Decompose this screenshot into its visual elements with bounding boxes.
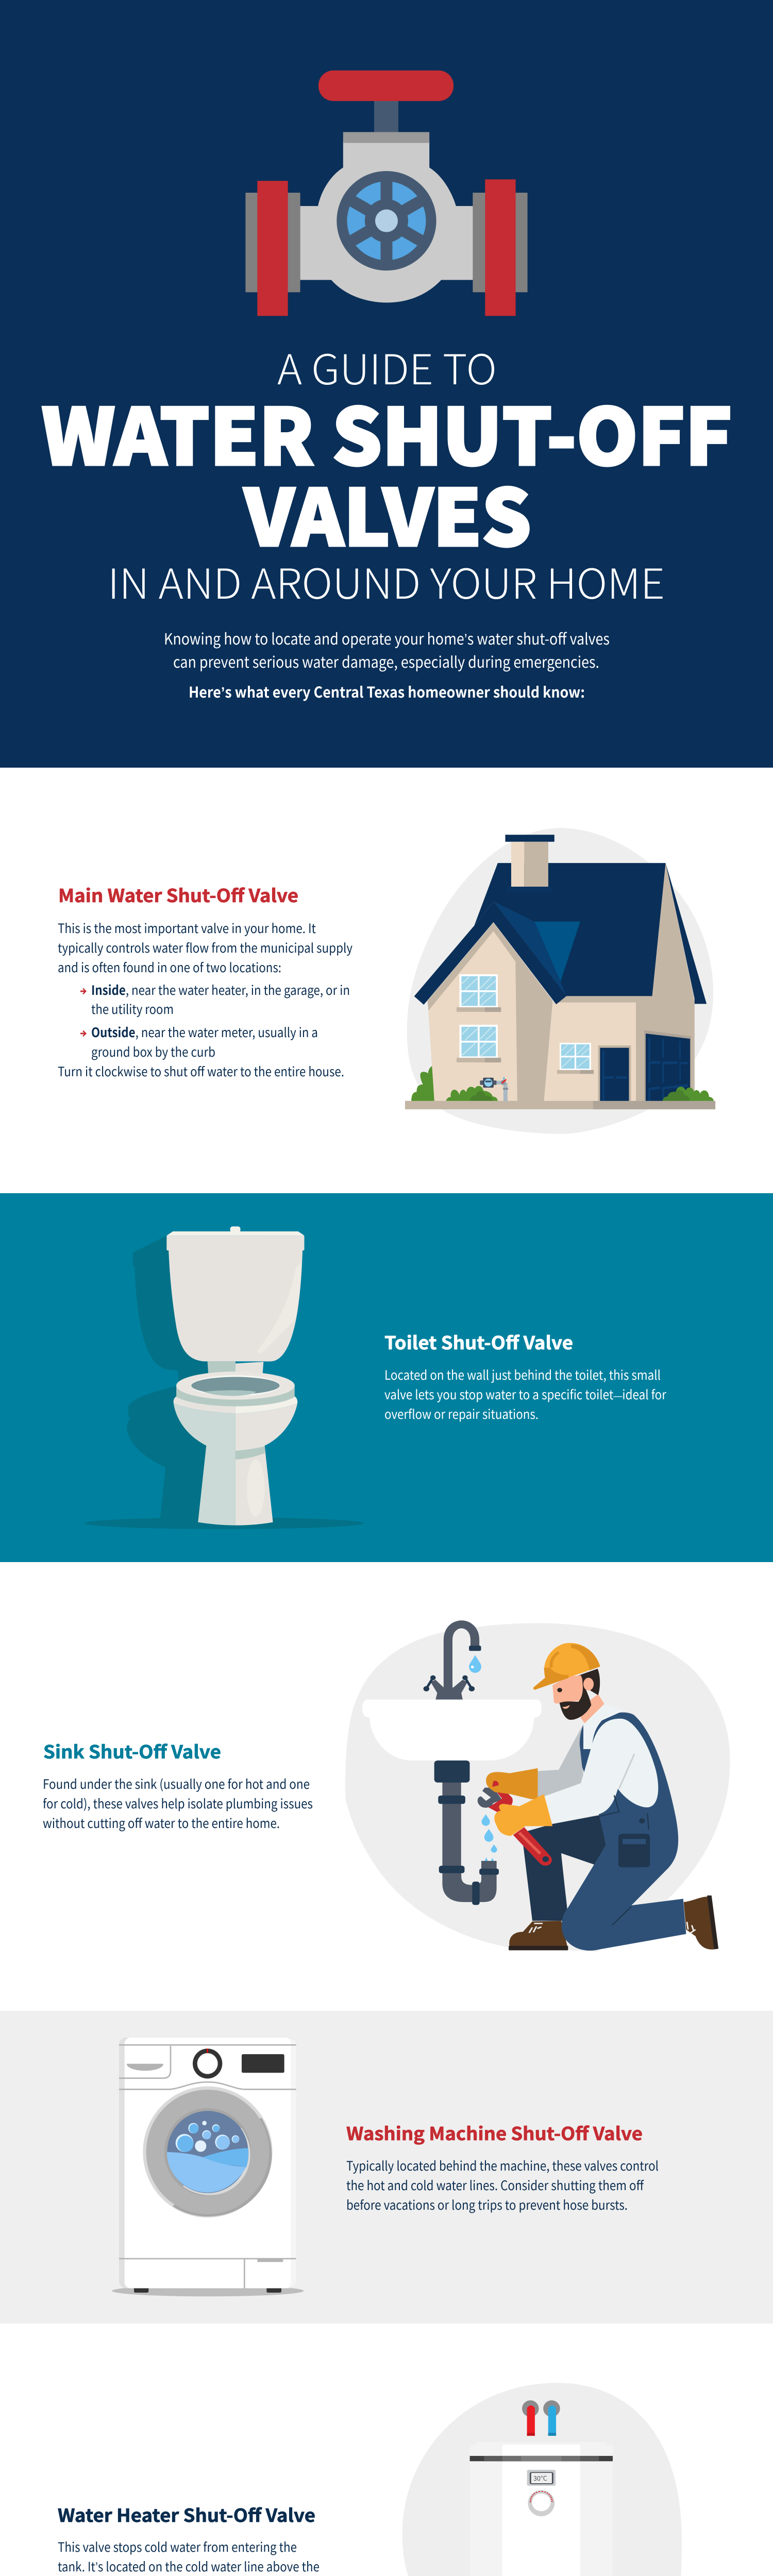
body text: typically controls water flow from the municipal supply [58, 938, 352, 957]
panel: hero [0, 0, 773, 768]
body text: and is often found in one of two locations: [58, 958, 281, 976]
body text: This valve stops cold water from entering the [58, 2537, 297, 2556]
intro text: Knowing how to locate and operate your home’s water shut-off valves [164, 626, 610, 649]
heading: valves: VALVES [243, 456, 531, 568]
illustration: water heater [402, 2383, 682, 2576]
illustration: washing machine [112, 2038, 304, 2296]
icon: bullet arrow inside [80, 988, 87, 994]
body text [43, 1774, 313, 1832]
body text: tank. It’s located on the cold water line above the [58, 2557, 320, 2575]
body text: This is the most important valve in your home. It [58, 919, 316, 937]
panel: main water shut-off valve [0, 768, 773, 1193]
body text: without cutting off water to the entire home. [43, 1814, 280, 1832]
heading: Toilet Shut-Off Valve [384, 1329, 573, 1355]
icon: sink basin [362, 1700, 542, 1760]
body text: overflow or repair situations. [384, 1404, 539, 1423]
body text: the hot and cold water lines. Consider shutting them off [346, 2176, 644, 2194]
heading: in and around your home: IN AND AROUND YOUR HOME [108, 551, 665, 611]
heading: Water Heater Shut-Off Valve [58, 2501, 315, 2528]
panel: toilet shut-off valve [0, 1193, 773, 1562]
icon: shut-off valve [245, 71, 528, 316]
intro text: Here’s what every Central Texas homeowner should know: [189, 681, 585, 702]
heading: Main Water Shut-Off Valve [58, 882, 298, 908]
illustration: toilet [85, 1226, 364, 1529]
body text: Typically located behind the machine, these valves control [346, 2156, 659, 2175]
body text: Found under the sink (usually one for hot and one [43, 1774, 310, 1793]
panel: washing machine shut-off valve [0, 2011, 773, 2324]
illustration: plumber fixing sink [345, 1623, 730, 1952]
illustration: water heater: 30°C [533, 2473, 547, 2483]
body text: Located on the wall just behind the toilet, this small [384, 1365, 661, 1384]
icon: drain pipe [434, 1760, 499, 1905]
body text [58, 919, 352, 1080]
body text: ground box by the curb [91, 1042, 215, 1061]
heading: a guide to: A GUIDE TO [277, 337, 497, 397]
heading: water shut-off: WATER SHUT-OFF [42, 376, 732, 487]
body text: for cold), these valves help isolate plumbing issues [43, 1794, 313, 1812]
body text: Outside, near the water meter, usually in a [91, 1023, 318, 1041]
body text: the utility room [91, 999, 174, 1018]
icon: water drops [481, 1814, 497, 1853]
illustration: house [405, 828, 715, 1134]
intro text: can prevent serious water damage, especially during emergencies. [173, 650, 599, 672]
panel: sink shut-off valve [0, 1562, 773, 2011]
body text: Inside, near the water heater, in the garage, or in [91, 980, 350, 999]
icon: faucet [424, 1624, 481, 1700]
intro text [164, 626, 610, 702]
figure: plumber [478, 1643, 718, 1951]
panel: water heater shut-off valve [0, 2324, 773, 2576]
body text [58, 2537, 320, 2576]
heading: Washing Machine Shut-Off Valve [346, 2120, 643, 2146]
body text [384, 1365, 666, 1423]
body text [346, 2156, 659, 2214]
body text: Turn it clockwise to shut off water to the entire house. [58, 1062, 344, 1080]
heading: Sink Shut-Off Valve [43, 1738, 221, 1764]
icon: water meter [480, 1077, 508, 1101]
body text: before vacations or long trips to prevent hose bursts. [346, 2195, 628, 2214]
icon: bullet arrow outside [80, 1030, 87, 1037]
body text: valve lets you stop water to a specific toilet—ideal for [384, 1385, 666, 1403]
